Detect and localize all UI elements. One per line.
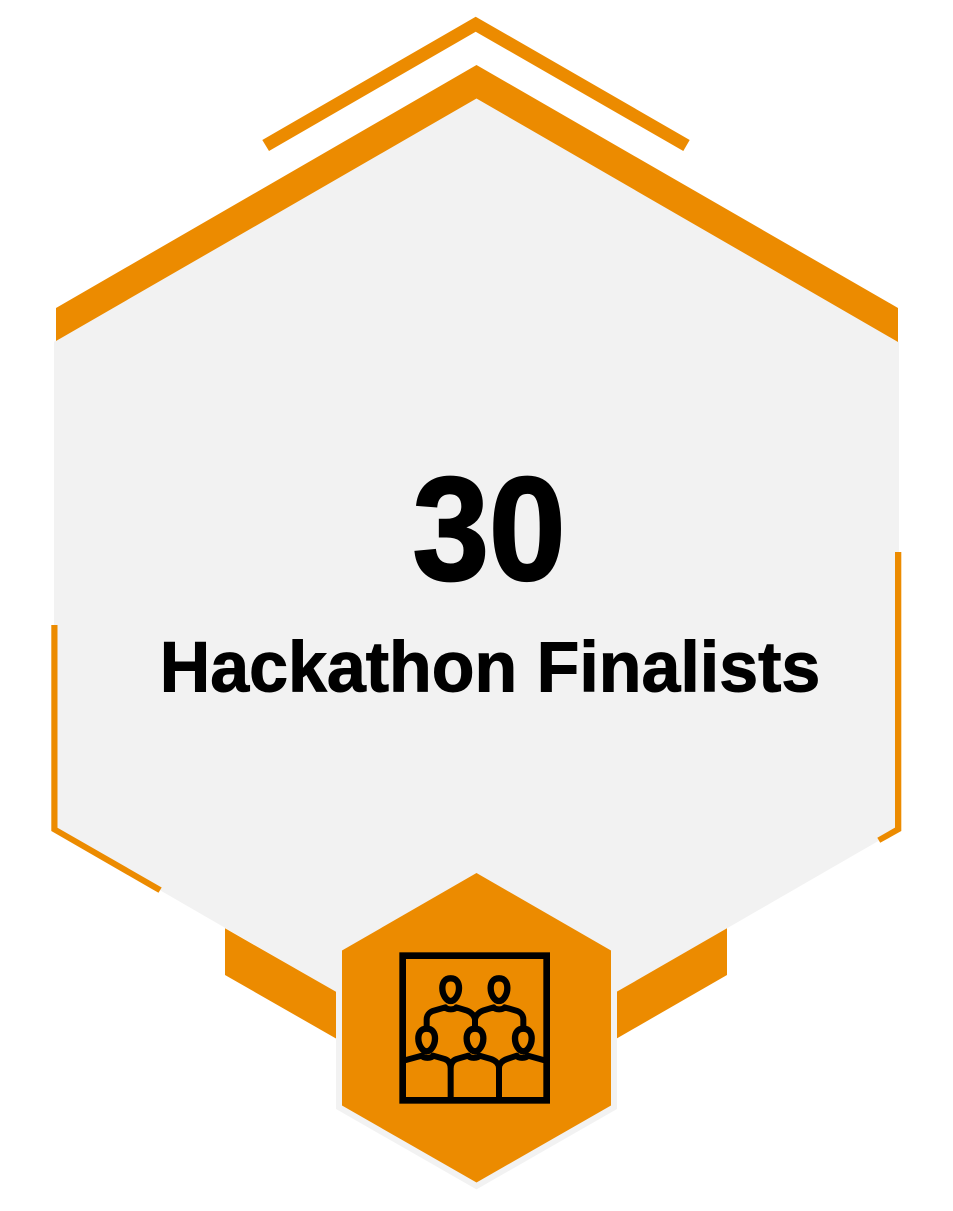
statistic label: Hackathon Finalists	[160, 627, 820, 707]
main hexagon panel	[51, 65, 901, 1073]
back row shoulders	[427, 1007, 523, 1027]
front row heads	[418, 1029, 532, 1051]
left outline accent	[51, 625, 162, 893]
back row heads	[442, 978, 507, 1001]
front row shoulders and dividers	[406, 1056, 543, 1098]
icon frame	[403, 956, 547, 1100]
statistic number: 30	[413, 447, 565, 612]
bottom right orange band	[617, 928, 727, 1038]
icon: group of people in frame	[403, 956, 547, 1100]
bottom left orange band	[225, 928, 336, 1038]
hexagon background	[54, 98, 899, 1073]
top chevron accent	[262, 17, 690, 151]
icon badge hexagon	[342, 873, 611, 1182]
right outline accent	[877, 552, 901, 843]
thick top border	[56, 65, 898, 342]
